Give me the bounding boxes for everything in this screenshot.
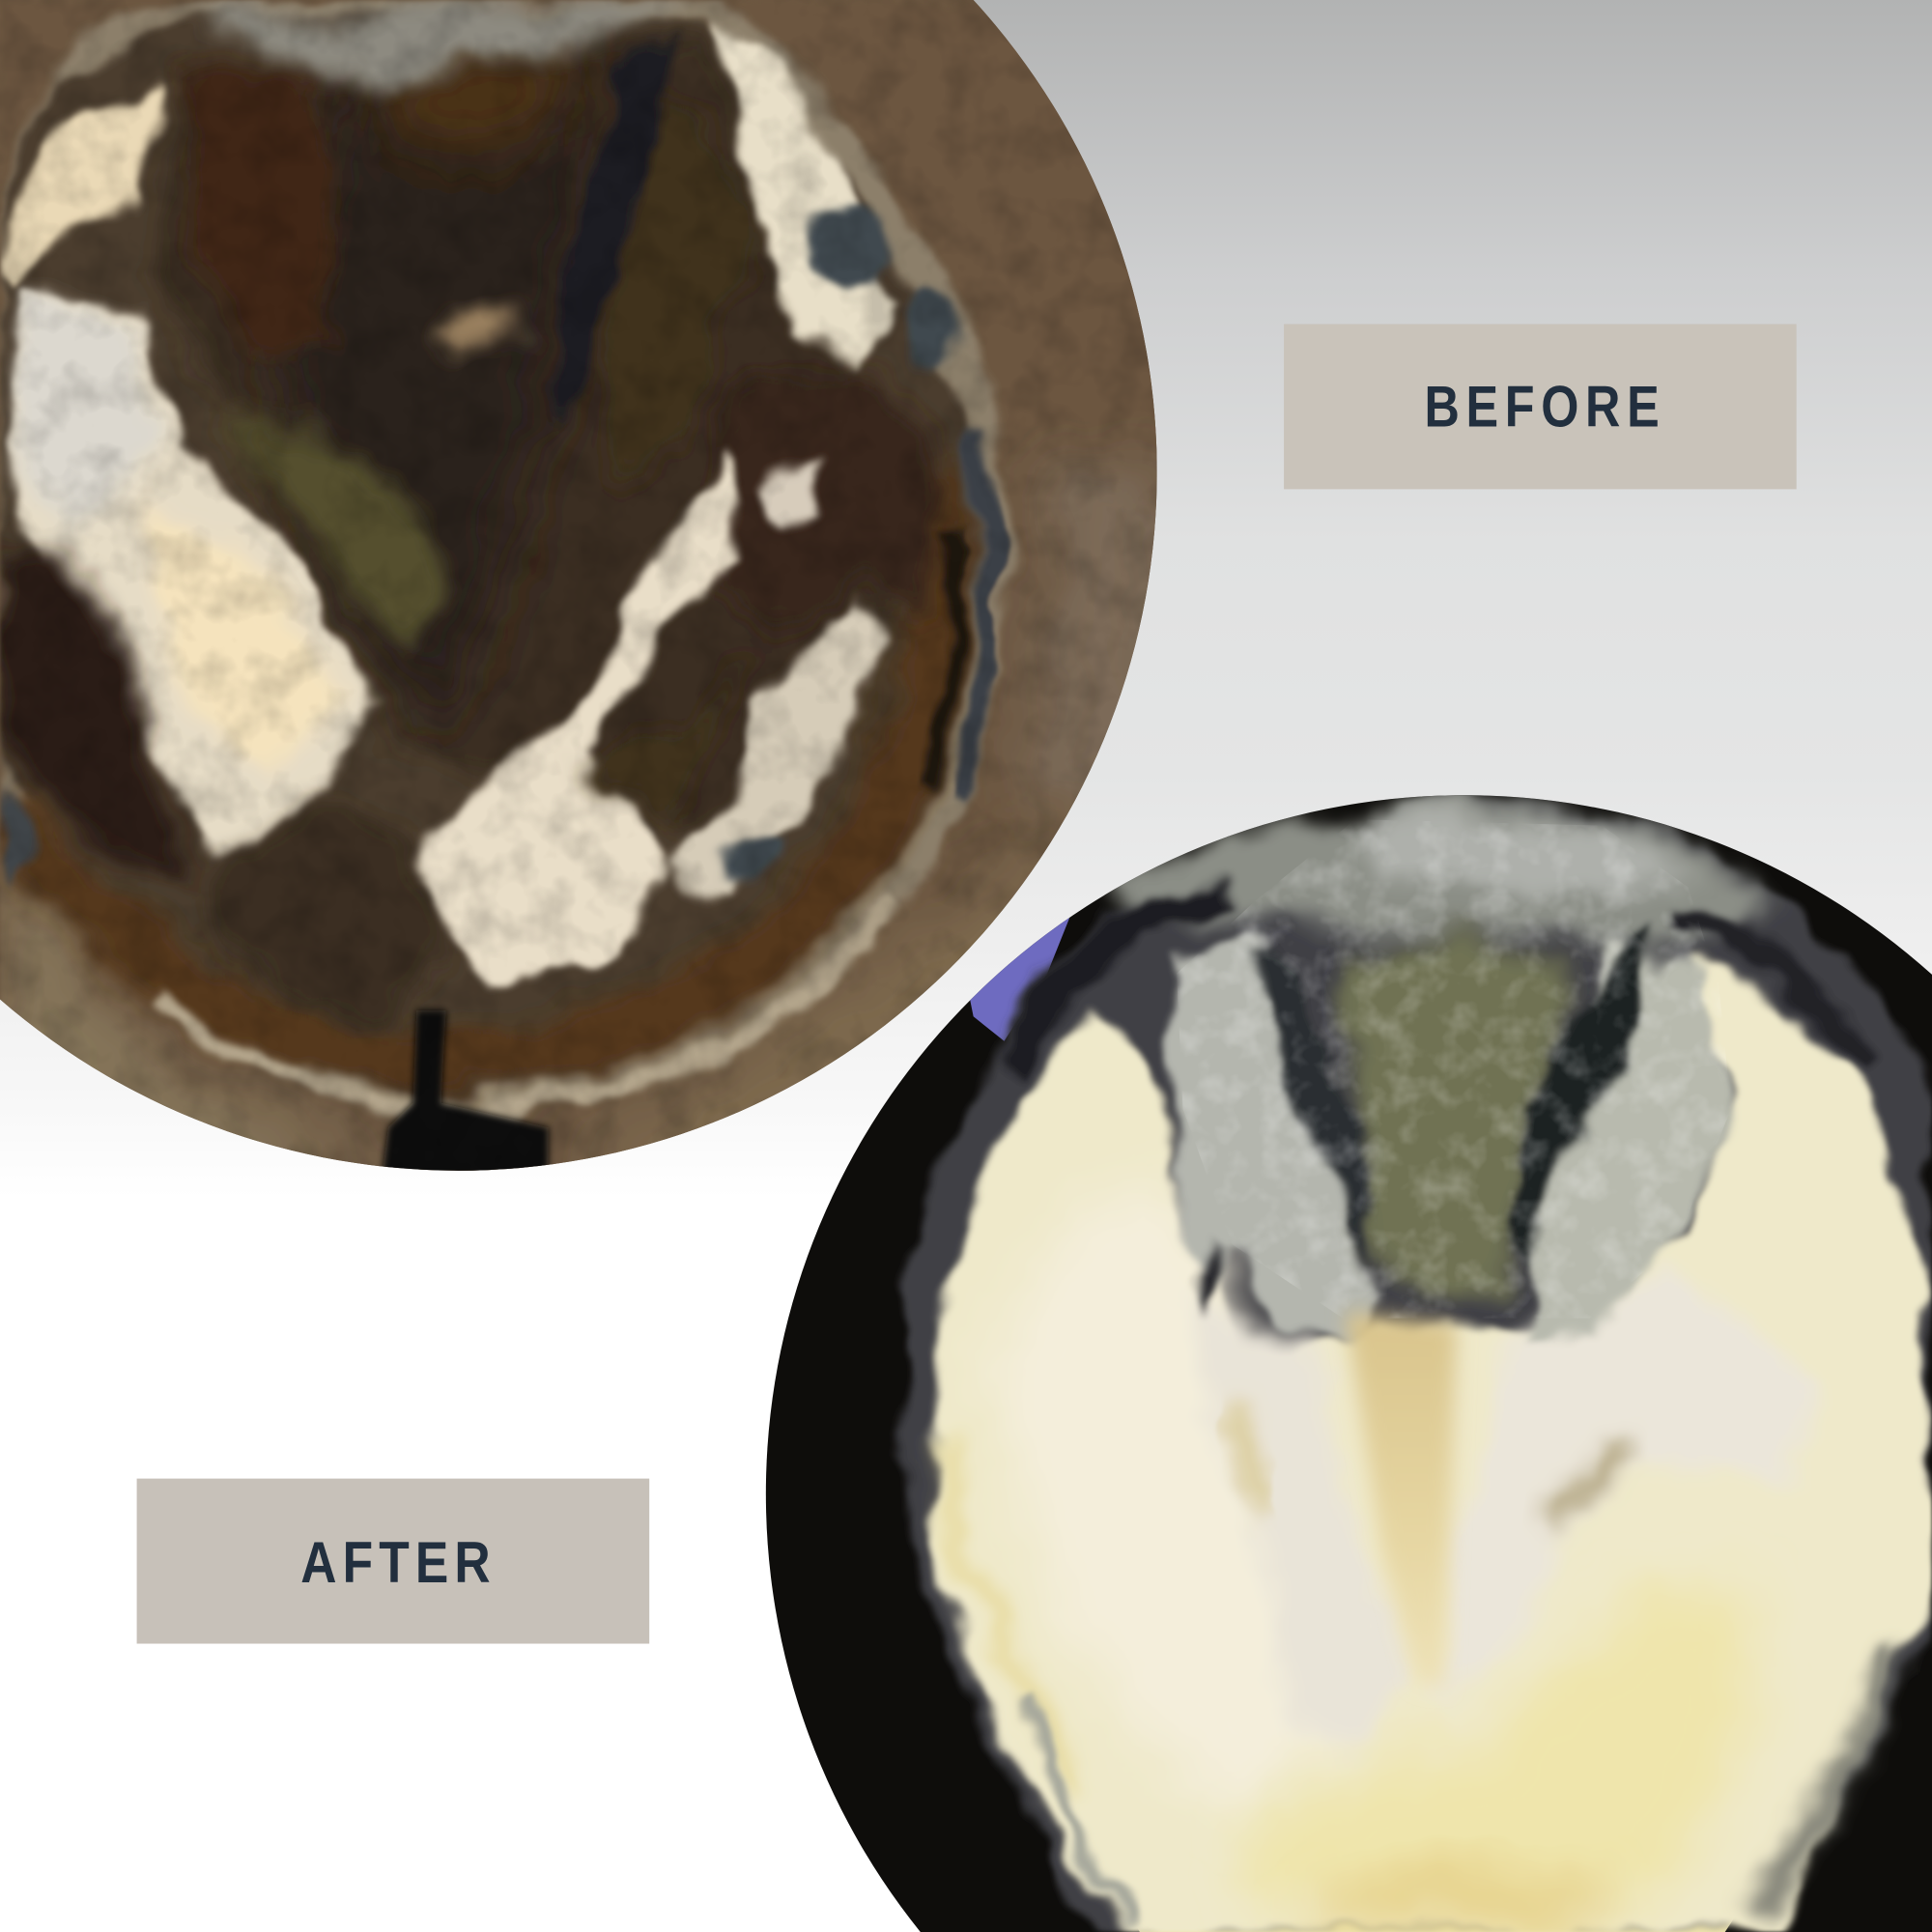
- top right cream strip: [721, 25, 887, 363]
- bottom crack: [382, 1010, 549, 1177]
- grey central cleft: [1343, 936, 1577, 1306]
- dark frog line: [542, 37, 680, 425]
- cream sole: [932, 961, 1932, 1932]
- hoof wall: [902, 801, 1932, 1932]
- lower wall edges: [1749, 1651, 1897, 1910]
- dark patch left: [0, 542, 197, 887]
- centre bottom cream patch: [419, 462, 739, 980]
- grey top tissue: [1084, 801, 1775, 949]
- yellow lower sole: [1233, 1580, 1751, 1910]
- purple glove: [967, 906, 1074, 1041]
- dark patch bottom: [210, 801, 450, 1023]
- photo: hoof after trimming: [764, 788, 1932, 1932]
- label: before: [1284, 324, 1797, 489]
- dark frog grooves: [1244, 955, 1380, 1269]
- white chalky frog arms: [1182, 1306, 1417, 1749]
- rusty rim: [6, 469, 941, 1060]
- label: after: [137, 1479, 649, 1644]
- photo: hoof before trimming: [0, 0, 1164, 1177]
- top left cream patch: [0, 86, 160, 296]
- frog ridges: [1171, 936, 1380, 1343]
- label: after: AFTER: [300, 1529, 491, 1595]
- dark sole centre: [148, 37, 936, 838]
- central tan wedge: [1346, 1312, 1457, 1688]
- right cream patch: [666, 604, 890, 899]
- hoof wall: [0, 0, 1011, 1127]
- olive patch: [215, 419, 443, 653]
- label: before: BEFORE: [1424, 374, 1660, 439]
- left cream patch: [13, 296, 370, 856]
